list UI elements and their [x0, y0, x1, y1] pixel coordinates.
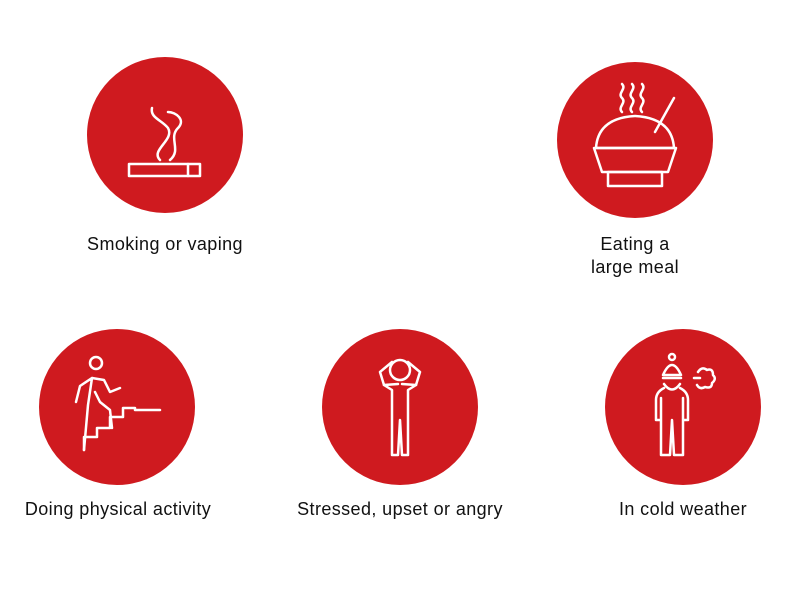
icon: cold weather — [605, 329, 761, 485]
icon: smoking — [87, 57, 243, 213]
label: eating a large meal: Eating a — [600, 234, 670, 254]
label: eating a large meal: large meal — [591, 257, 679, 277]
label: cold weather: In cold weather — [619, 499, 747, 519]
icon: eating meal — [557, 62, 713, 218]
icon: physical activity — [39, 329, 195, 485]
label: stressed: Stressed, upset or angry — [297, 499, 503, 519]
label: eating a large meal — [591, 234, 679, 277]
label: smoking or vaping: Smoking or vaping — [87, 234, 243, 254]
label: doing physical activity: Doing physical activity — [25, 499, 211, 519]
icon: stressed — [322, 329, 478, 485]
